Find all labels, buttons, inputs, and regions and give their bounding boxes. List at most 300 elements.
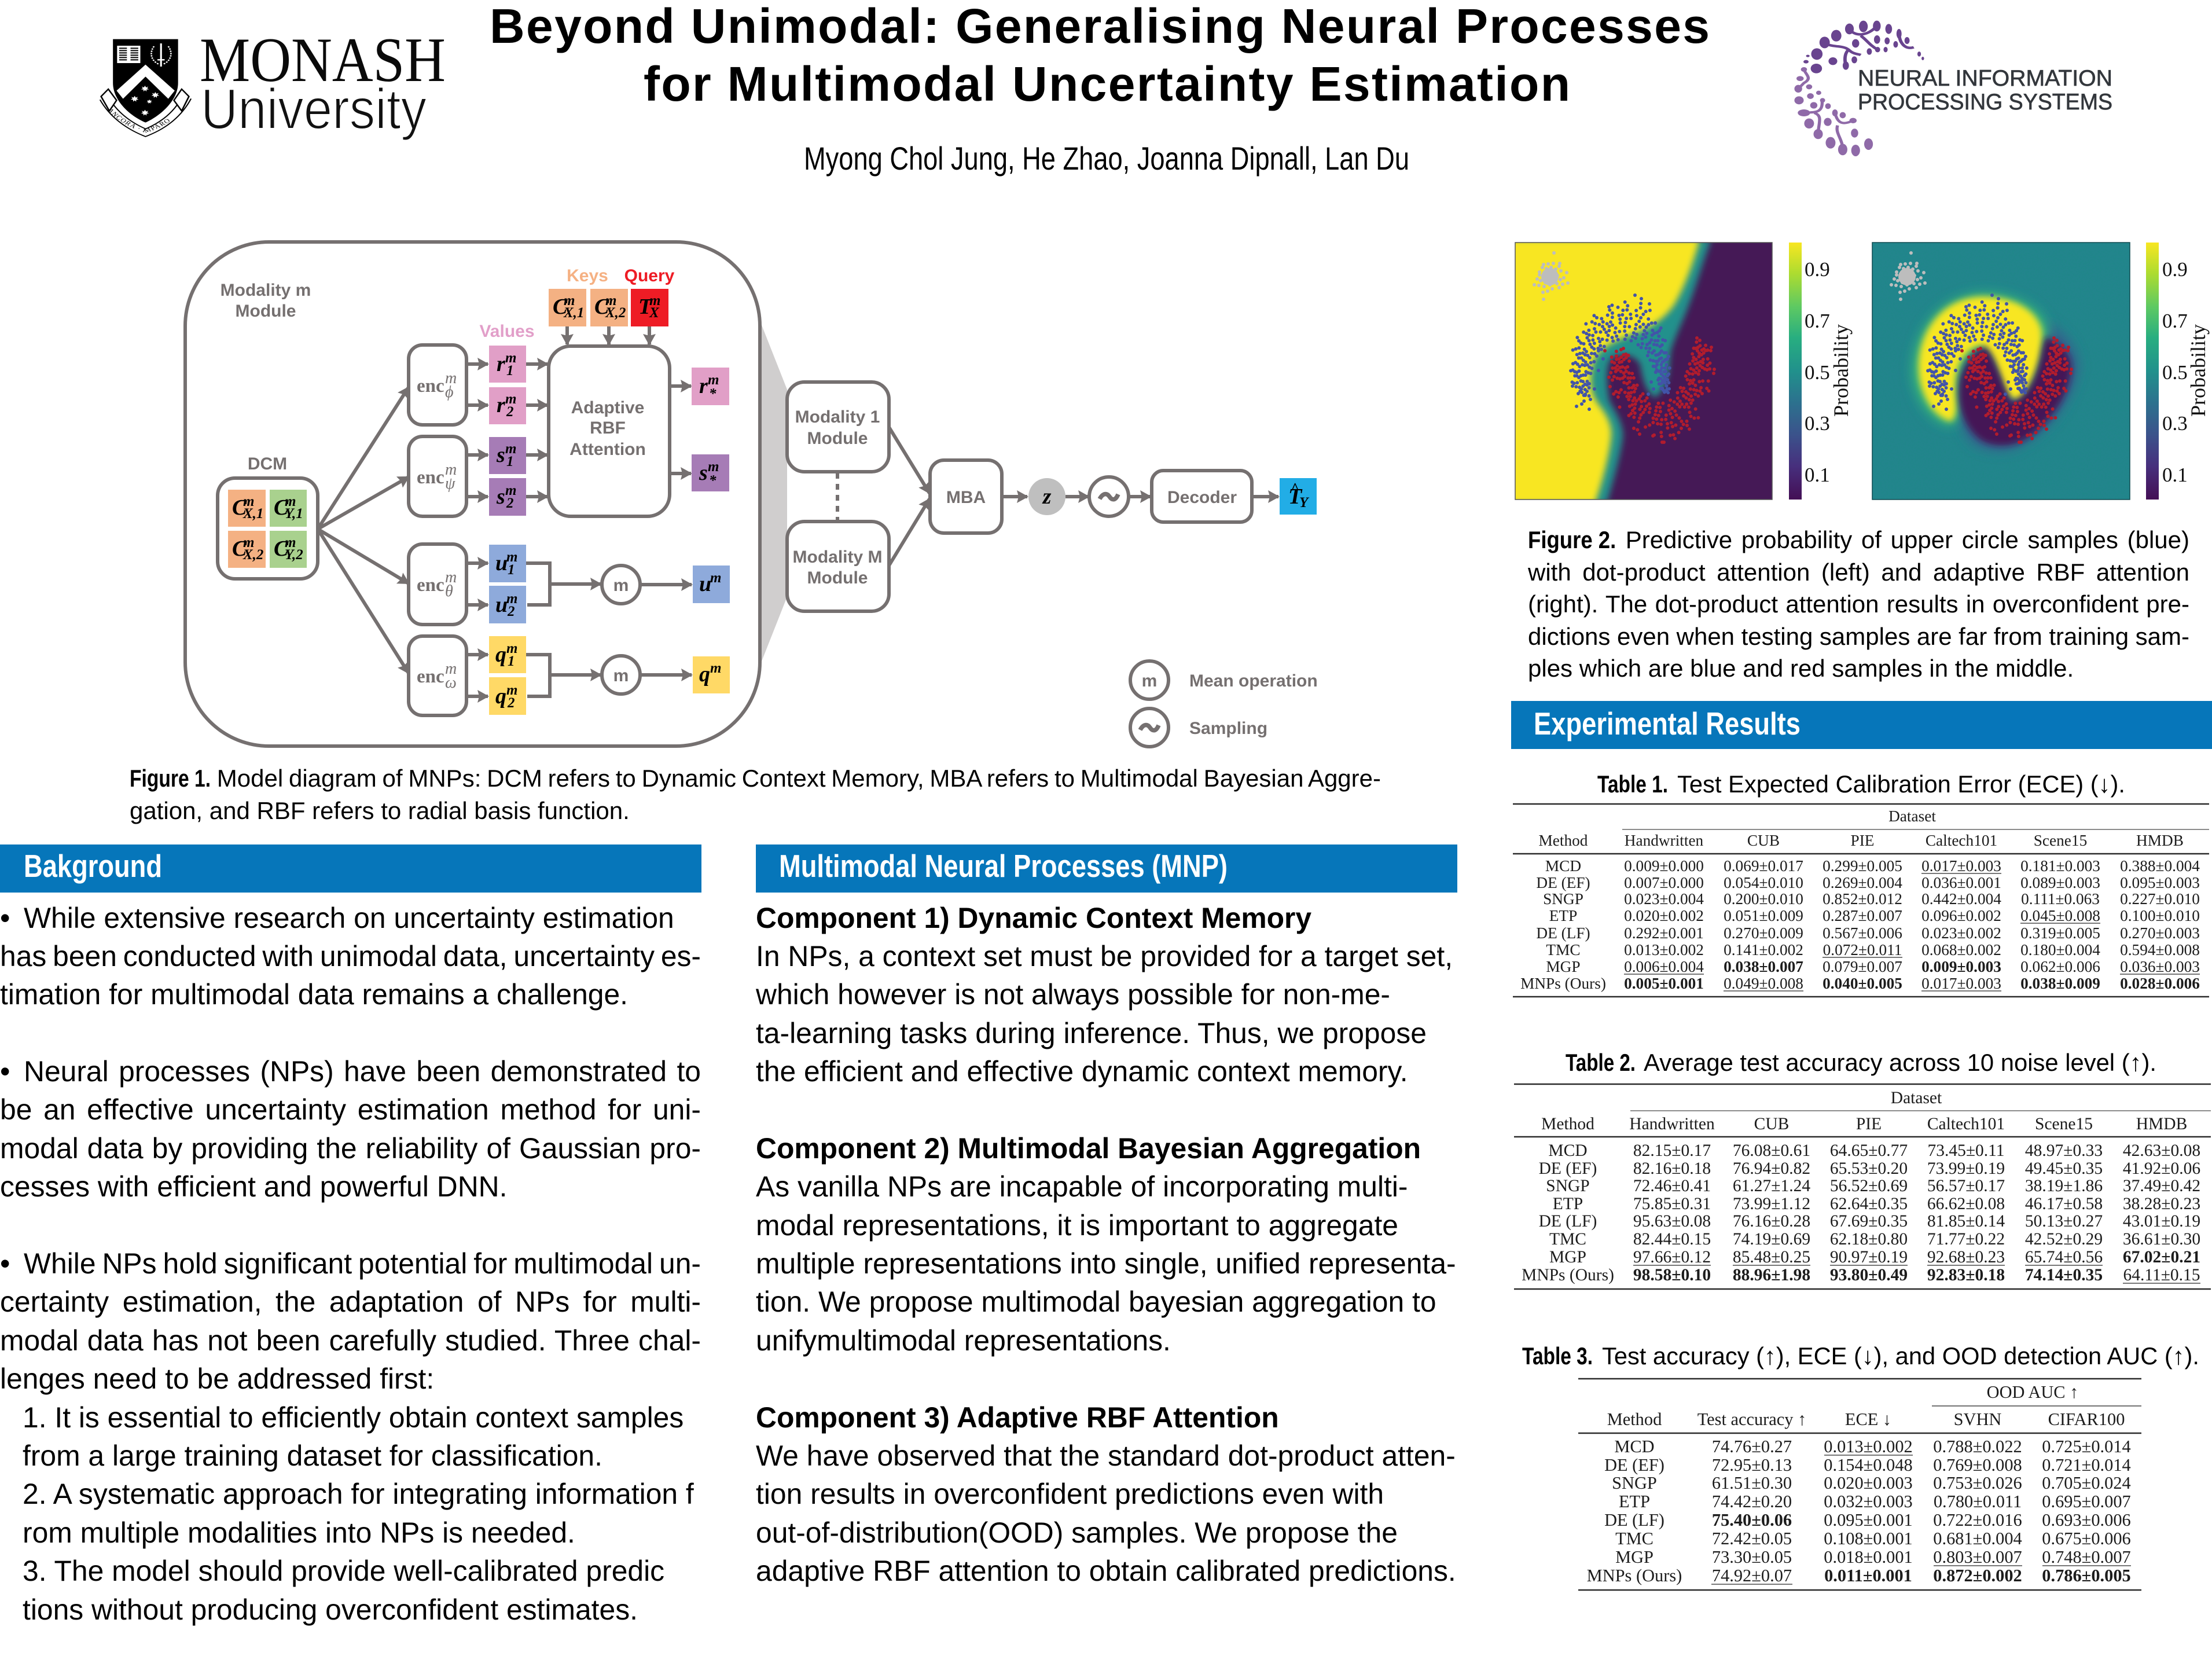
encoders: ω [445,674,457,692]
values squares: r [497,393,506,417]
table 2: accuracy across noise levels: 62.64±0.35 [1830,1195,1908,1213]
table 1: expected calibration error: 0.072±0.011 [1823,941,1902,959]
text block: multimodal neural processes components: modal representations, it is important to aggregate [756,1209,1398,1242]
table 2: accuracy across noise levels: DE (EF) [1539,1159,1597,1178]
figure 2 caption: dictions even when testing samples are far from training sam- [1528,623,2189,649]
table 2: accuracy across noise levels: 42.63±0.08 [2123,1141,2200,1160]
table 1: expected calibration error: PIE [1851,832,1874,849]
table 3: accuracy, ECE and OOD AUC: ETP [1619,1492,1650,1511]
mean branch: u: m [710,570,721,586]
table 3: accuracy, ECE and OOD AUC: 0.020±0.003 [1824,1473,1913,1493]
table 3: accuracy, ECE and OOD AUC: 0.788±0.022 [1933,1437,2022,1456]
mean branch: q: q [699,662,710,686]
table 1: expected calibration error: 0.045±0.008 [2020,907,2100,924]
keys and query: C [553,295,568,319]
table 2: accuracy across noise levels: MNPs (Ours) [1522,1266,1614,1284]
table 3: accuracy, ECE and OOD AUC: 0.725±0.014 [2042,1437,2131,1456]
keys and query: m [564,293,575,309]
table 1: expected calibration error: 0.089±0.003 [2020,874,2100,891]
table 1: expected calibration error: 0.269±0.004 [1822,874,1902,891]
values squares: m [506,549,517,565]
table 2: accuracy across noise levels: 95.63±0.08 [1633,1212,1711,1231]
table 2: accuracy across noise levels: 64.65±0.77 [1830,1141,1908,1160]
table 3: accuracy, ECE and OOD AUC: 0.721±0.014 [2042,1455,2131,1475]
pipeline: MBA, z, sampling, decoder, output: Y [1299,495,1310,511]
values squares: 2 [507,695,515,711]
colorbar: left: 0.7 [1805,310,1830,332]
text block: multimodal neural processes components: We have observed that the standard dot-product atten- [756,1440,1456,1472]
table 3: accuracy, ECE and OOD AUC: DE (LF) [1604,1510,1664,1530]
text block: background: modal data has not been carefully studied. Three chal- [0,1324,701,1357]
values squares [479,322,535,715]
encoders [409,345,466,715]
table 2: accuracy across noise levels: Caltech101 [1927,1115,2005,1133]
table 1: expected calibration error: 0.227±0.010 [2120,890,2200,908]
DCM block: Y,1 [285,506,303,522]
table 3: accuracy, ECE and OOD AUC: MCD [1614,1437,1655,1456]
adaptive RBF attention: * [709,386,716,402]
table 1: expected calibration error: 0.007±0.000 [1624,874,1704,891]
table 3: accuracy, ECE and OOD AUC: 0.675±0.006 [2042,1529,2131,1548]
pipeline: MBA, z, sampling, decoder, output [930,460,1317,533]
table 1: expected calibration error: 0.049±0.008 [1724,975,1803,992]
text block: multimodal neural processes components: As vanilla NPs are incapable of incorporating multi- [756,1170,1408,1203]
text block: background: tions without producing overconfident estimates. [23,1593,638,1626]
table 2: accuracy across noise levels: 74.14±0.35 [2025,1266,2103,1284]
table 1 caption: Test Expected Calibration Error (ECE) (↓). [1677,770,2125,798]
table 2: accuracy across noise levels: 75.85±0.31 [1633,1195,1711,1213]
mean branch: u: m [613,576,629,595]
table 3: accuracy, ECE and OOD AUC: 75.40±0.06 [1712,1510,1792,1530]
values squares: m [506,641,517,656]
arrows: DCM to encoders [318,387,409,673]
keys and query: Keys [567,266,608,285]
DCM block: C [232,495,247,520]
modality modules [787,382,889,611]
keys and query: X [649,305,660,321]
table 2: accuracy across noise levels: 65.53±0.20 [1830,1159,1908,1178]
table 3: accuracy, ECE and OOD AUC: 0.013±0.002 [1824,1437,1913,1456]
table 2: accuracy across noise levels: PIE [1856,1115,1882,1133]
figure 2 caption: (right). The dot-product attention results in overconfident pre- [1528,590,2189,618]
values squares: m [505,483,516,498]
keys and query: T [638,295,653,319]
table 3: accuracy, ECE and OOD AUC: 0.786±0.005 [2042,1566,2131,1585]
table 1: expected calibration error: 0.068±0.002 [1921,941,2001,959]
text block: background: While extensive research on uncertainty estimation [24,902,674,934]
text block: background: • [0,1247,10,1280]
text block: multimodal neural processes components: Component 3) Adaptive RBF Attention [756,1401,1279,1434]
table 2: accuracy across noise levels: 36.61±0.30 [2123,1230,2200,1249]
grey out-of-distribution cluster [1534,253,1568,299]
keys and query: X,1 [563,305,584,321]
table 1: expected calibration error: 0.100±0.010 [2120,907,2200,924]
figure 1 caption: gation, and RBF refers to radial basis function. [130,796,630,824]
table 2: accuracy across noise levels: 43.01±0.19 [2123,1212,2200,1231]
values squares: 2 [506,404,514,420]
text block: multimodal neural processes components: which however is not always possible for non-me- [756,978,1390,1011]
pipeline: MBA, z, sampling, decoder, output: z [1042,484,1052,509]
table 2: accuracy across noise levels: TMC [1549,1230,1586,1249]
table 3: accuracy, ECE and OOD AUC: 0.154±0.048 [1824,1455,1913,1475]
table 3: accuracy, ECE and OOD AUC: 0.693±0.006 [2042,1510,2131,1530]
table 2: accuracy across noise levels: 92.68±0.23 [1927,1248,2005,1266]
title: for Multimodal Uncertainty Estimation [644,57,1570,111]
table 1: expected calibration error: DE (LF) [1536,924,1590,942]
table 1: expected calibration error: 0.567±0.006 [1822,924,1902,942]
table 2: accuracy across noise levels: ETP [1553,1195,1583,1213]
table 1: expected calibration error: 0.023±0.004 [1624,890,1704,908]
table 2: accuracy across noise levels: SNGP [1546,1177,1590,1195]
text block: background: has been conducted with unimodal data, uncertainty es- [0,940,701,972]
values squares: r [497,352,506,376]
table 1: expected calibration error: 0.036±0.003 [2120,958,2200,975]
table 2: accuracy across noise levels: 65.74±0.56 [2025,1248,2103,1266]
table 3 caption: Table 3. [1522,1342,1593,1369]
table 3: accuracy, ECE and OOD AUC: 0.011±0.001 [1824,1566,1912,1585]
table 1: expected calibration error: 0.388±0.004 [2120,857,2200,875]
figure 2 caption [1528,526,2189,682]
logo: Neural Information Processing Systems [1794,21,2112,156]
heading bar: Bakground: Bakground [24,849,162,884]
adaptive RBF attention: RBF [590,418,626,438]
table 1: expected calibration error: Dataset [1888,807,1936,825]
legend: Sampling [1189,719,1267,738]
table 3: accuracy, ECE and OOD AUC: 74.92±0.07 [1712,1566,1792,1585]
text block: multimodal neural processes components: tion results in overconfident predictions even with [756,1478,1384,1510]
scatter: moons and OOD cluster [1534,253,1714,442]
figure 2 caption: ples which are blue and red samples in the middle. [1528,655,2074,682]
table 1: expected calibration error: 0.005±0.001 [1624,975,1704,992]
table 2: accuracy across noise levels: 82.15±0.17 [1633,1141,1711,1160]
DCM block: Y,2 [285,547,303,563]
encoders: m [445,568,457,586]
DCM block: m [243,494,254,509]
table 3: accuracy, ECE and OOD AUC: 0.018±0.001 [1824,1547,1913,1567]
table 2: accuracy across noise levels: 74.19±0.69 [1733,1230,1810,1249]
table 2: accuracy across noise levels: 62.18±0.80 [1830,1230,1908,1249]
table 1: expected calibration error: DE (EF) [1536,874,1590,891]
DCM block: X,1 [242,506,263,522]
table 2: accuracy across noise levels: 67.02±0.21 [2123,1248,2200,1266]
encoders: enc [417,376,444,396]
table 2: accuracy across noise levels: 46.17±0.58 [2025,1195,2103,1213]
table 1: expected calibration error: 0.292±0.001 [1624,924,1704,942]
table 1: expected calibration error: CUB [1747,832,1780,849]
text block: background: Neural processes (NPs) have been demonstrated to [24,1055,701,1088]
table 2: accuracy across noise levels: DE (LF) [1539,1212,1597,1231]
table 1: expected calibration error: 0.111±0.063 [2021,890,2100,908]
icon: purple neural dots [1794,21,1924,156]
table 1: expected calibration error: MGP [1546,958,1581,975]
table 3: accuracy, ECE and OOD AUC: 0.753±0.026 [1933,1473,2022,1493]
mean branch: q: m [613,666,629,685]
table 1: expected calibration error: 0.040±0.005 [1822,975,1902,992]
table 1: expected calibration error: MNPs (Ours) [1520,975,1606,992]
heading bar: Bakground [0,844,701,893]
values squares: s [496,443,505,467]
table 2: accuracy across noise levels: MCD [1548,1141,1588,1160]
table 2: accuracy across noise levels: 56.57±0.17 [1927,1177,2005,1195]
table 1: expected calibration error: MCD [1545,857,1581,875]
text block: multimodal neural processes components: Component 2) Multimodal Bayesian Aggregation [756,1132,1421,1165]
chart: dot-product attention heatmap [1505,239,1772,504]
table 1: expected calibration error: 0.319±0.005 [2020,924,2100,942]
arrows: encoder to latent squares [468,364,488,696]
table 1: expected calibration error: 0.036±0.001 [1921,874,2001,891]
heading bar: Experimental Results [1511,701,2212,749]
text block: multimodal neural processes components: multiple representations into single, unified representa- [756,1247,1456,1280]
table 1: expected calibration error: 0.006±0.004 [1624,958,1704,975]
table 2: accuracy across noise levels: CUB [1754,1115,1789,1133]
table 2: accuracy across noise levels: Handwritten [1629,1115,1715,1133]
table 3: accuracy, ECE and OOD AUC: 0.108±0.001 [1824,1529,1913,1548]
table 2: accuracy across noise levels: 97.66±0.12 [1633,1248,1711,1266]
values squares: s [496,484,505,509]
text block: multimodal neural processes components: unifymultimodal representations. [756,1324,1171,1357]
text block: multimodal neural processes components: out-of-distribution(OOD) samples. We propose the [756,1517,1398,1549]
text block: background: modal data by providing the reliability of Gaussian pro- [0,1132,701,1165]
table 3: accuracy, ECE and OOD AUC: 0.872±0.002 [1933,1566,2022,1585]
table 1: expected calibration error: 0.069±0.017 [1724,857,1803,875]
table 2: accuracy across noise levels: 73.45±0.11 [1927,1141,2005,1160]
table 3: accuracy, ECE and OOD AUC: SNGP [1612,1473,1657,1493]
encoders: m [445,461,457,479]
mean branch: q: m [710,660,721,676]
table 1: expected calibration error [1513,804,2209,997]
text block: background: certainty estimation, the adaptation of NPs for multi- [0,1286,701,1318]
table 2: accuracy across noise levels: 76.16±0.28 [1733,1212,1810,1231]
table 2: accuracy across noise levels: 49.45±0.35 [2025,1159,2103,1178]
table 1: expected calibration error: TMC [1546,941,1581,959]
encoders: enc [417,575,444,596]
figure 2 caption: with dot-product attention (left) and adaptive RBF attention [1528,558,2189,586]
table 1: expected calibration error: 0.270±0.009 [1724,924,1803,942]
table 1: expected calibration error: 0.062±0.006 [2020,958,2100,975]
values squares: q [495,642,506,667]
values squares: Values [479,322,535,341]
table 3: accuracy, ECE and OOD AUC: 73.30±0.05 [1712,1547,1792,1567]
text block: background: • [0,902,10,934]
table 1: expected calibration error: 0.013±0.002 [1624,941,1704,959]
table 1: expected calibration error: 0.028±0.006 [2120,975,2200,992]
table 1: expected calibration error: Method [1539,832,1588,849]
table 3: accuracy, ECE and OOD AUC: DE (EF) [1604,1455,1664,1475]
table 1: expected calibration error: 0.096±0.002 [1921,907,2001,924]
pipeline: MBA, z, sampling, decoder, output: T [1288,484,1303,509]
values squares: 1 [508,562,515,578]
table 3: accuracy, ECE and OOD AUC: CIFAR100 [2048,1409,2125,1429]
text block: multimodal neural processes components: In NPs, a context set must be provided for a target set, [756,940,1453,972]
text block: background: rom multiple modalities into NPs is needed. [23,1517,575,1549]
DCM block: C [274,537,289,561]
legend [1130,661,1318,747]
encoders: enc [417,666,444,687]
modality modules: Modality M [793,548,882,567]
values squares: m [505,391,516,407]
table 1: expected calibration error: 0.095±0.003 [2120,874,2200,891]
text block: background: cesses with efficient and powerful DNN. [0,1170,507,1203]
table 3: accuracy, ECE and OOD AUC: 0.748±0.007 [2042,1547,2131,1567]
table 1: expected calibration error: 0.270±0.003 [2120,924,2200,942]
table 3: accuracy, ECE and OOD AUC: ECE ↓ [1845,1409,1891,1429]
values squares: u [495,551,508,575]
title: Beyond Unimodal: Generalising Neural Processes [490,0,1710,53]
colorbar: left: 0.3 [1805,412,1830,435]
encoders: θ [445,582,453,600]
table 1: expected calibration error: SNGP [1543,890,1583,908]
encoders: enc [417,467,444,488]
table 1: expected calibration error: 0.023±0.002 [1921,924,2001,942]
table 2: accuracy across noise levels [1514,1084,2211,1289]
table 3: accuracy, ECE and OOD AUC: Test accuracy ↑ [1697,1409,1806,1429]
figure 1 caption [130,765,1381,824]
table 3: accuracy, ECE and OOD AUC: 0.681±0.004 [1933,1529,2022,1548]
table 1: expected calibration error: 0.299±0.005 [1822,857,1902,875]
table 2: accuracy across noise levels: 56.52±0.69 [1830,1177,1908,1195]
table 1: expected calibration error: 0.180±0.004 [2020,941,2100,959]
figure 1 caption: Model diagram of MNPs: DCM refers to Dynamic Context Memory, MBA refers to Multimodal Bayesian Aggre- [217,765,1381,792]
chart: model diagram [185,242,1318,747]
figure 2 caption: Predictive probability of upper circle samples (blue) [1626,526,2189,553]
table 3: accuracy, ECE and OOD AUC: 0.803±0.007 [1933,1547,2022,1567]
colorbar: right: 0.7 [2162,310,2188,332]
table 2: accuracy across noise levels: 38.28±0.23 [2123,1195,2200,1213]
table 3: accuracy, ECE and OOD AUC [1578,1379,2141,1590]
colorbar: left: Probability [1829,324,1853,417]
blue upper moon samples [1571,295,1670,409]
table 2: accuracy across noise levels: 82.16±0.18 [1633,1159,1711,1178]
table 3: accuracy, ECE and OOD AUC: 0.705±0.024 [2042,1473,2131,1493]
adaptive RBF attention: Attention [569,440,646,459]
table 1: expected calibration error: 0.181±0.003 [2020,857,2100,875]
DCM block: DCM [248,454,287,473]
text block: background: lenges need to be addressed first: [0,1363,434,1395]
table 2: accuracy across noise levels: Dataset [1891,1089,1942,1107]
adaptive RBF attention: Adaptive [571,398,644,417]
modality modules: Module [807,429,868,448]
wordmark: University: University [201,77,427,141]
keys and query: X,2 [605,305,626,321]
table 1: expected calibration error: 0.038±0.007 [1724,958,1803,975]
table 3: accuracy, ECE and OOD AUC: Method [1607,1409,1662,1429]
crest: Monash shield: ANCORA · IMPARO [108,109,170,133]
values squares: m [506,682,517,698]
table 1: expected calibration error: 0.020±0.002 [1624,907,1704,924]
adaptive RBF attention: r [699,374,708,398]
keys and query: Query [624,266,675,285]
text block: background: be an effective uncertainty estimation method for uni- [0,1093,701,1126]
authors: Myong Chol Jung, He Zhao, Joanna Dipnall, Lan Du [804,140,1409,177]
table 2: accuracy across noise levels: 73.99±0.19 [1927,1159,2005,1178]
colorbar: right: Probability [2187,324,2210,417]
colorbar: right [2146,243,2210,500]
table 1: expected calibration error: 0.051±0.009 [1724,907,1803,924]
table 3: accuracy, ECE and OOD AUC: 0.722±0.016 [1933,1510,2022,1530]
table 1: expected calibration error: 0.009±0.003 [1921,958,2001,975]
table 1: expected calibration error: 0.594±0.008 [2120,941,2200,959]
heading bar: Multimodal Neural Processes: Multimodal Neural Processes (MNP) [779,849,1228,884]
mean branch: u: u [699,572,711,596]
wordmark: Processing Systems: PROCESSING SYSTEMS [1858,90,2112,115]
table 2: accuracy across noise levels: 38.19±1.86 [2025,1177,2103,1195]
table 2: accuracy across noise levels: 50.13±0.27 [2025,1212,2103,1231]
values squares: 2 [506,495,514,511]
table 1: expected calibration error: 0.200±0.010 [1724,890,1803,908]
table 2: accuracy across noise levels: Scene15 [2035,1115,2093,1133]
adaptive RBF attention: s [699,461,708,485]
table 1: expected calibration error: 0.009±0.000 [1624,857,1704,875]
table 3: accuracy, ECE and OOD AUC: 72.42±0.05 [1712,1529,1792,1548]
table 1: expected calibration error: ETP [1549,907,1577,924]
encoders: m [445,660,457,678]
values squares: m [506,591,517,607]
adaptive RBF attention: m [708,459,719,475]
panel: modality m module [185,242,760,746]
keys and query [549,266,675,344]
wordmark: NeurIPS: NEURAL INFORMATION [1858,66,2112,91]
table 1: expected calibration error: Scene15 [2034,832,2087,849]
text block: background: 3. The model should provide well-calibrated predic [23,1555,664,1587]
modality modules: Modality 1 [795,407,880,427]
table 2: accuracy across noise levels: 61.27±1.24 [1733,1177,1810,1195]
text block: background: • [0,1055,10,1088]
values squares: 1 [506,454,514,469]
table 2: accuracy across noise levels: 76.94±0.82 [1733,1159,1810,1178]
text block: background: 2. A systematic approach for integrating information f [23,1478,694,1510]
scatter: moons and OOD cluster [1891,253,2071,442]
table 2: accuracy across noise levels: 66.62±0.08 [1927,1195,2005,1213]
text block: multimodal neural processes components: tion. We propose multimodal bayesian aggregation to [756,1286,1436,1318]
text block: background [0,902,701,1626]
colorbar: right: 0.1 [2162,464,2188,486]
table 3: accuracy, ECE and OOD AUC: TMC [1615,1529,1654,1548]
values squares: q [495,684,506,708]
pipeline: MBA, z, sampling, decoder, output: Decoder [1167,488,1237,507]
table 2: accuracy across noise levels: 41.92±0.06 [2123,1159,2200,1178]
text block: multimodal neural processes components: adaptive RBF attention to obtain calibrated predictions. [756,1555,1456,1587]
table 2: accuracy across noise levels: 85.48±0.25 [1733,1248,1810,1266]
text block: background: from a large training dataset for classification. [23,1440,602,1472]
DCM block: C [274,495,289,520]
table 1: expected calibration error: Handwritten [1625,832,1704,849]
table 2 caption: Average test accuracy across 10 noise level (↑). [1644,1049,2156,1076]
table 3: accuracy, ECE and OOD AUC: 74.42±0.20 [1712,1492,1792,1511]
table 2: accuracy across noise levels: 82.44±0.15 [1633,1230,1711,1249]
modality modules: Module [807,568,868,588]
colorbar: right: 0.3 [2162,412,2188,435]
table 2: accuracy across noise levels: 71.77±0.22 [1927,1230,2005,1249]
logo: Monash University [100,25,446,141]
pipeline: MBA, z, sampling, decoder, output: ^ [1291,480,1299,497]
DCM block: m [285,535,296,550]
table 1: expected calibration error: 0.017±0.003 [1921,975,2001,992]
table 2 caption: Table 2. [1566,1049,1636,1076]
wordmark: MONASH: MONASH [200,25,446,95]
table 3: accuracy, ECE and OOD AUC: 72.95±0.13 [1712,1455,1792,1475]
colorbar: left [1789,243,1853,500]
encoders: m [445,369,457,387]
table 1: expected calibration error: 0.442±0.004 [1921,890,2001,908]
DCM block: C [232,537,247,561]
mean branch: u [526,563,730,605]
table 1: expected calibration error: 0.287±0.007 [1822,907,1902,924]
values squares: 1 [508,653,515,669]
table 2: accuracy across noise levels: 93.80±0.49 [1830,1266,1908,1284]
DCM block: X,2 [242,547,263,563]
figure 1 caption: Figure 1. [130,765,211,792]
table 2: accuracy across noise levels: 64.11±0.15 [2123,1266,2200,1284]
